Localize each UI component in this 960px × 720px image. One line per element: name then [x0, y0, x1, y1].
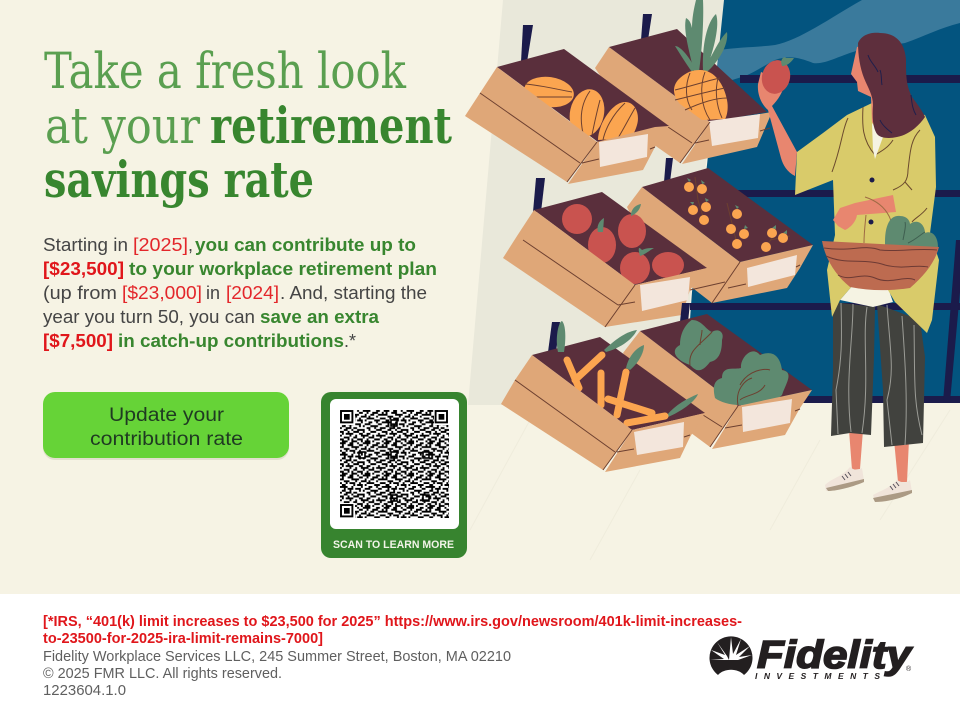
body text: in catch-up contributions	[118, 331, 344, 351]
body text	[43, 235, 437, 351]
Fidelity Investments logo	[710, 634, 914, 681]
woman shopping	[758, 33, 939, 502]
apple	[758, 57, 794, 97]
basket with greens	[822, 197, 939, 290]
title: at your	[45, 97, 200, 155]
body text: [$7,500]	[43, 331, 113, 351]
body text: ,	[188, 235, 193, 255]
body text: .*	[344, 331, 356, 351]
shirt collar	[872, 123, 883, 159]
crate: carrots	[501, 321, 705, 472]
white shirt hem	[840, 285, 893, 307]
yellow jacket	[795, 103, 939, 333]
crate: lettuce	[623, 303, 812, 449]
QR code card	[321, 392, 467, 558]
body text: [2024]	[226, 283, 279, 303]
body text: you can contribute up to	[195, 235, 416, 255]
body text: (up from	[43, 283, 117, 303]
Fidelity Investments logo: INVESTMENTS	[755, 671, 880, 681]
legs	[849, 430, 909, 482]
raised arm	[758, 72, 797, 176]
footer disclosure text: 1223604.1.0	[43, 682, 126, 699]
button: update contribution rate	[43, 392, 289, 460]
body text: [$23,000]	[122, 283, 202, 303]
footer disclosure text	[43, 614, 742, 699]
Fidelity Investments logo: Fidelity	[757, 634, 914, 677]
title: savings rate	[44, 150, 314, 209]
body text: in	[206, 283, 220, 303]
title	[44, 42, 452, 209]
jacket details	[832, 107, 927, 222]
logo icon: sunburst	[710, 636, 753, 675]
pineapple	[674, 0, 728, 120]
QR code	[340, 410, 449, 518]
hair	[858, 33, 925, 138]
shoes	[825, 467, 912, 502]
carrots	[557, 321, 698, 423]
footer disclosure text: [*IRS, “401(k) limit increases to $23,500 for 2025” https://www.irs.gov/newsroom/401k-limit-increases-	[43, 614, 742, 630]
body text: Starting in	[43, 235, 128, 255]
crate: melons	[465, 25, 669, 184]
neck and face	[851, 40, 884, 132]
body text: save an extra	[260, 307, 380, 327]
body text: [$23,500]	[43, 259, 124, 279]
QR code card: SCAN TO LEARN MORE	[333, 539, 454, 551]
button: update contribution rate: Update your	[109, 405, 225, 426]
crate: apples	[503, 178, 707, 327]
button: update contribution rate: contribution rate	[90, 429, 243, 450]
store backdrop: wall, refrigerated case and floor	[468, 0, 960, 560]
body text: [2025]	[133, 235, 188, 255]
crate: orange fruit on vines	[627, 158, 813, 303]
body text: year you turn 50, you can	[43, 307, 255, 327]
footer disclosure text: to-23500-for-2025-ira-limit-remains-7000]	[43, 631, 323, 647]
striped trousers	[831, 302, 925, 447]
footer disclosure text: Fidelity Workplace Services LLC, 245 Summer Street, Boston, MA 02210	[43, 648, 511, 665]
body text: . And, starting the	[280, 283, 427, 303]
buttons	[868, 178, 874, 224]
oranges	[684, 177, 790, 252]
crate: pineapple	[595, 0, 772, 164]
Fidelity Investments logo: ®	[906, 665, 912, 673]
lower arm	[833, 195, 896, 230]
title: retirement	[210, 96, 452, 155]
title: Take a fresh look	[44, 42, 407, 100]
body text: to your workplace retirement plan	[129, 259, 437, 279]
footer disclosure text: © 2025 FMR LLC. All rights reserved.	[43, 665, 282, 682]
